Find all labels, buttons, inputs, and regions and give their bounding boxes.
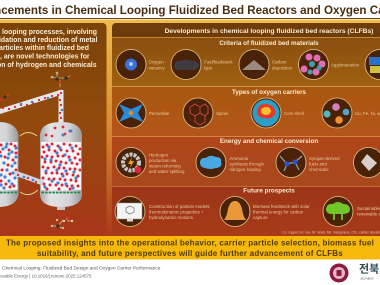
citation: ewable Energy | 10.1016/j.renene.2025.124575 bbox=[0, 274, 92, 278]
label: particle models: thermodynamic properties + bbox=[149, 210, 204, 214]
label: carbon deposition: Carbon bbox=[272, 60, 287, 64]
icon: biomass bbox=[220, 196, 250, 226]
label: particle models: hydrodynamic motions bbox=[149, 215, 194, 220]
label: core shell: Core shell bbox=[284, 111, 304, 116]
label: perovskite: Perovskite bbox=[149, 111, 170, 116]
icon: sustainable cloud bbox=[323, 196, 353, 226]
icon: agglomeration bbox=[298, 50, 328, 80]
section: energy and chemical conversion bbox=[112, 136, 380, 186]
label: biomass: thermal energy for carbon bbox=[253, 210, 304, 214]
intro text: articles within fluidized bed bbox=[0, 45, 89, 52]
heading: criteria: Criteria of fluidized bed materials bbox=[219, 40, 319, 47]
intro text: , are novel technologies for bbox=[0, 54, 90, 60]
citation: Chemical Looping: Fluidized Bed Design and Oxygen Carrier Performance bbox=[2, 266, 161, 272]
icon: metal particles bbox=[322, 98, 352, 128]
molecule: bottom bbox=[51, 212, 73, 229]
section: oxygen carrier types bbox=[112, 86, 380, 136]
left vessel bbox=[0, 122, 18, 207]
icon: ammonia bbox=[196, 148, 226, 178]
icon: oxygen vacancy bbox=[116, 50, 146, 80]
label: oxygen vacancy: Oxygen bbox=[148, 60, 164, 64]
molecule: top bbox=[51, 72, 71, 87]
reactor diagram bbox=[0, 72, 82, 229]
panel: left introduction bbox=[0, 23, 106, 236]
label: oxygen vacancy: vacancy bbox=[148, 66, 165, 70]
label: fuel/feedstock: type bbox=[204, 66, 213, 70]
intro text: idation and reduction of metal bbox=[0, 37, 97, 44]
label: sustainable: Sustainable bbox=[357, 206, 380, 211]
conclusion banner bbox=[0, 236, 380, 260]
label: spinel: Spinel bbox=[216, 111, 228, 116]
icon: carbon deposition bbox=[239, 50, 269, 80]
label: syngas: fuels and bbox=[309, 162, 327, 166]
intro text: looping processes, involving bbox=[2, 29, 97, 36]
intro text bbox=[0, 29, 97, 69]
conclusion banner: suitability, and future perspectives will guide further advancement of CLFBs bbox=[37, 249, 343, 258]
label: hydrogen production: and water splitting bbox=[149, 169, 185, 174]
riser pipes bbox=[0, 92, 62, 112]
icon: spinel bbox=[183, 98, 213, 128]
icon: syngas bbox=[276, 148, 306, 178]
citation bbox=[0, 266, 161, 278]
icon: perovskite bbox=[116, 98, 146, 128]
conclusion banner: The proposed insights into the operational behavior, carrier particle selection, biomass fuel bbox=[6, 238, 374, 248]
label: biomass: capture bbox=[253, 215, 268, 220]
heading: developments: Developments in chemical looping fluidized bed reactors (CLFBs) bbox=[165, 28, 373, 35]
label: agglomeration: Agglomeration bbox=[331, 62, 360, 68]
heading: types: Types of oxygen carriers bbox=[232, 89, 307, 96]
icon: attrition bbox=[365, 50, 380, 80]
pipe particles bbox=[3, 93, 61, 182]
icon: particle models bbox=[115, 196, 145, 226]
label: ammonia: Ammonia bbox=[230, 156, 249, 161]
panel: developments bbox=[112, 23, 380, 236]
logo: university: JEONBUK bbox=[360, 276, 374, 280]
label: ammonia: nitrogen looping bbox=[230, 167, 261, 172]
logo: university: 전북 bbox=[359, 262, 379, 276]
label: ammonia: synthesis through bbox=[230, 162, 264, 166]
label: hydrogen production: steam reforming bbox=[149, 164, 181, 168]
label: carbon deposition: deposition bbox=[272, 66, 293, 70]
label: syngas: chemicals bbox=[309, 167, 329, 172]
logo: university bbox=[330, 262, 379, 282]
footnote: Cu: copper, Fe: iron, Ni: nickel, Mn: manganese, CO₂: carbon dioxide bbox=[282, 230, 380, 234]
label: particle models: Construction of particle models: bbox=[149, 204, 210, 209]
icon: fuel cell bbox=[354, 148, 380, 178]
icon: core shell bbox=[251, 98, 281, 128]
label: hydrogen production: production via bbox=[149, 158, 177, 163]
label: biomass: Biomass feedstock with solar bbox=[253, 204, 310, 209]
icon: fuel/feedstock bbox=[171, 50, 201, 80]
section: criteria bbox=[112, 37, 380, 86]
loop arrows bbox=[20, 132, 38, 195]
icon: hydrogen production bbox=[116, 148, 146, 178]
section: future prospects bbox=[112, 186, 380, 236]
molecule: side bbox=[0, 94, 9, 102]
heading: energy: Energy and chemical conversion bbox=[220, 138, 318, 145]
crossing pipe bbox=[15, 173, 43, 183]
right vessel bbox=[40, 122, 82, 210]
label: syngas: Syngas-derived bbox=[309, 156, 340, 161]
heading: future: Future prospects bbox=[243, 188, 295, 194]
label: hydrogen production: Hydrogen bbox=[149, 152, 169, 158]
label: fuel/feedstock: Fuel/feedstock bbox=[204, 60, 233, 64]
